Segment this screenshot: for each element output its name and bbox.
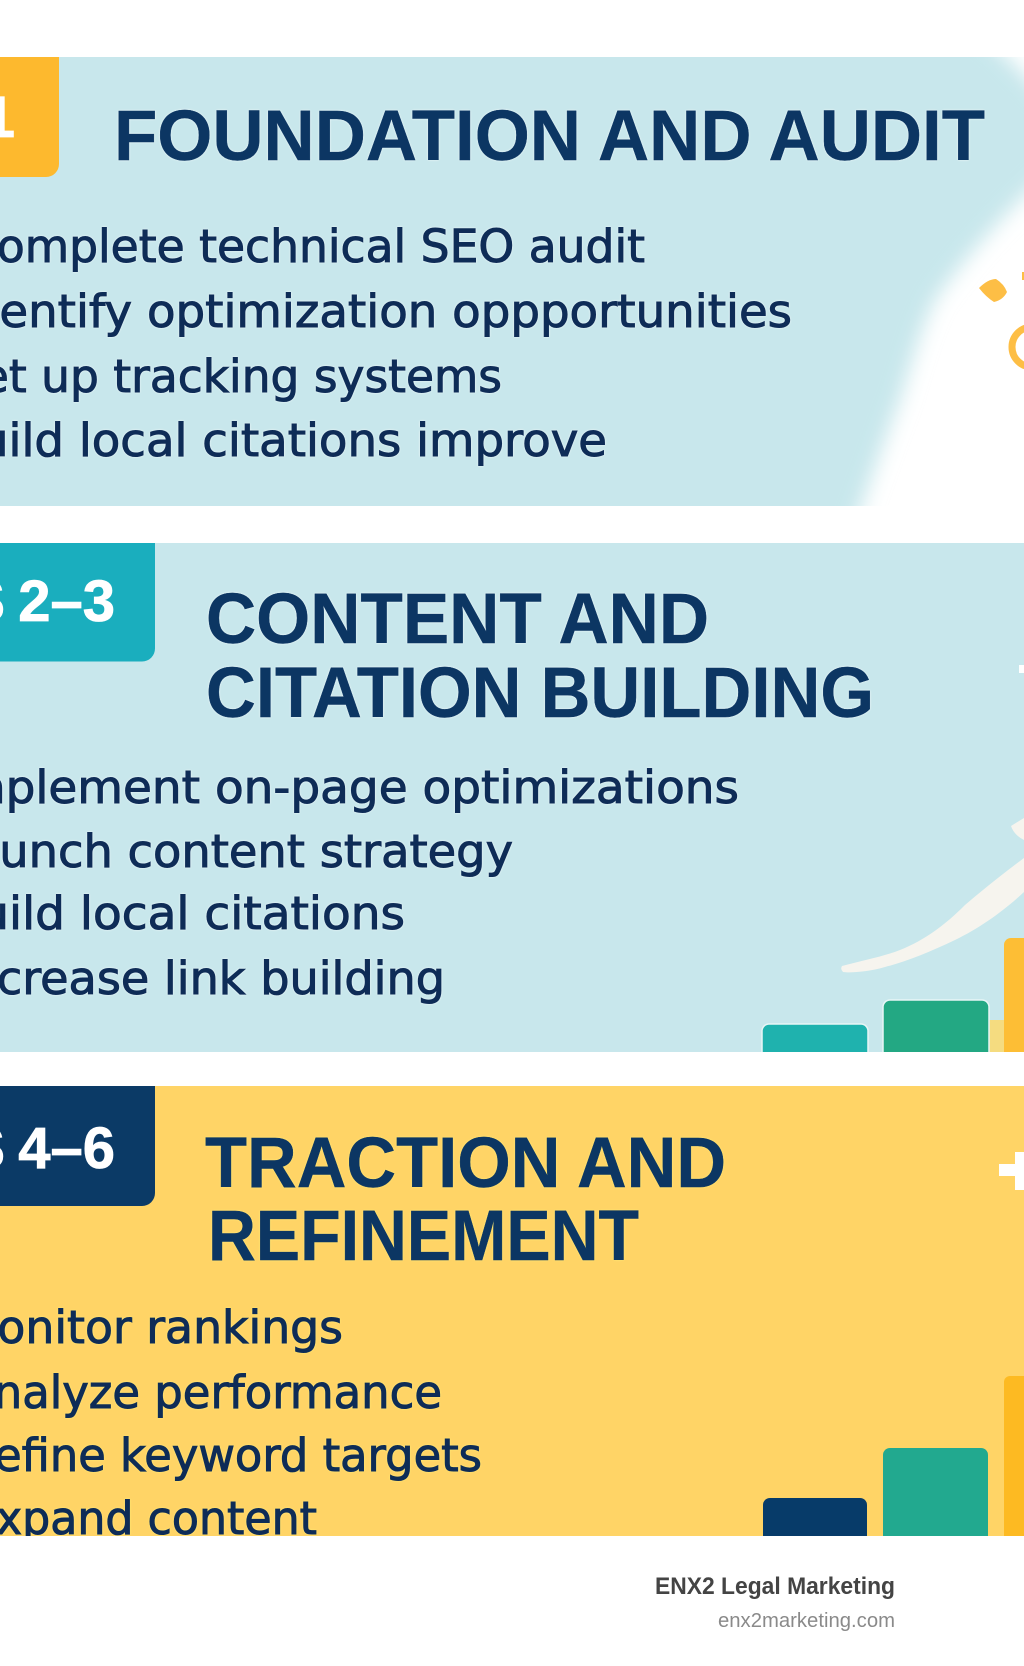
task list: content xyxy=(0,761,739,1005)
icon: white plus xyxy=(999,1152,1024,1190)
heading: traction and refinement xyxy=(205,1136,724,1261)
badge: weeks 2-3 xyxy=(0,530,155,662)
badge: week 1 xyxy=(0,57,59,177)
task list: foundation xyxy=(0,220,792,467)
panel: weeks 4-6 traction and refinement xyxy=(0,1070,1024,1548)
heading: content and citation building: CONTENT AND xyxy=(206,580,709,659)
brand name: ENX2 Legal Marketing xyxy=(655,1573,895,1600)
arrow: rising white trend curve xyxy=(841,818,1024,972)
badge: weeks 4-6 xyxy=(0,1086,155,1206)
icon: orange sparkle marks xyxy=(979,272,1024,367)
heading: traction and refinement: REFINEMENT xyxy=(208,1197,639,1276)
panel background xyxy=(0,543,1024,1053)
website: enx2marketing.com xyxy=(718,1610,895,1632)
panel background with faded right edge xyxy=(0,57,1024,506)
footer: brand attribution xyxy=(655,1573,895,1632)
heading: traction and refinement: TRACTION AND xyxy=(205,1124,726,1203)
icon: white plus fragment xyxy=(1019,665,1024,673)
panel: week 1 foundation and audit xyxy=(0,57,1024,506)
bar chart: growth bars xyxy=(762,938,1024,1064)
panel background xyxy=(0,1086,1024,1536)
heading: foundation and audit: FOUNDATION AND AUDIT xyxy=(114,97,985,176)
task list: traction xyxy=(0,1301,482,1545)
heading: content and citation building: CITATION BUILDING xyxy=(206,654,874,733)
bar chart: traction bars xyxy=(763,1376,1024,1548)
panel: weeks 2-3 content and citation building xyxy=(0,530,1024,1064)
heading: content and citation building xyxy=(208,592,871,718)
